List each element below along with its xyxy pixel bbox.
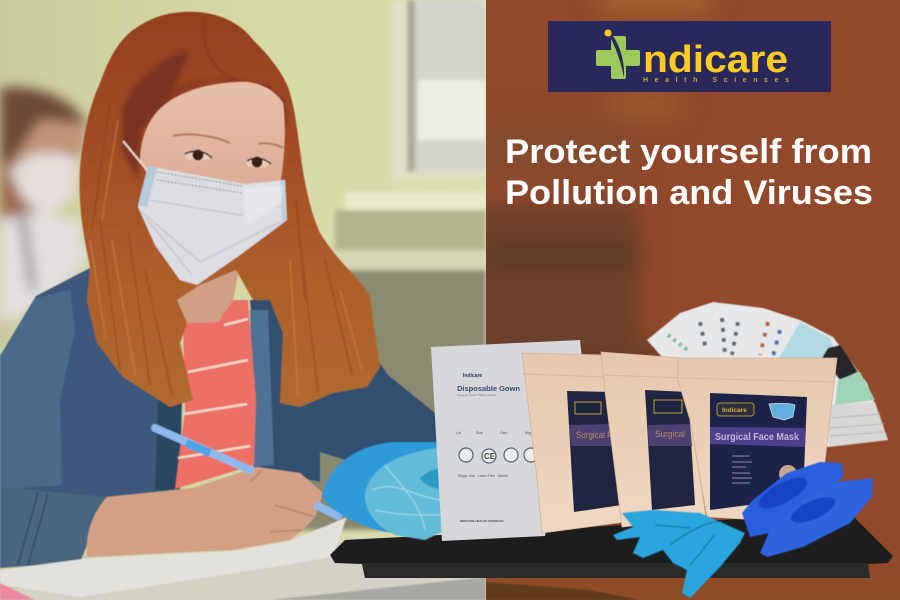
blue shoe covers bbox=[742, 462, 873, 557]
label panel bbox=[710, 393, 807, 510]
shadow under hair near ear bbox=[122, 50, 190, 180]
icon: green cross bbox=[596, 30, 640, 79]
disposable gown pack bbox=[431, 340, 582, 541]
blue mask bbox=[778, 322, 838, 360]
indicare badge bbox=[717, 403, 754, 416]
hair strands bbox=[92, 100, 352, 395]
hair caps bbox=[322, 442, 446, 540]
product tray bbox=[330, 513, 893, 578]
pink folder corner bbox=[0, 583, 35, 600]
logo on gown pack: Indicare bbox=[463, 373, 482, 379]
hair bbox=[79, 12, 380, 407]
face bbox=[140, 82, 285, 200]
label bbox=[645, 390, 695, 510]
disposable gown pack: Gsm bbox=[500, 431, 507, 435]
disposable gown pack: Single Use · Latex Free · Sterile bbox=[458, 474, 508, 478]
disposable gown pack: INDICARE HEALTH SCIENCES bbox=[460, 519, 503, 523]
title bbox=[505, 133, 873, 212]
window sill and cabinet bbox=[300, 192, 486, 530]
title: Protect yourself from bbox=[505, 133, 872, 171]
kraft pouch middle bbox=[601, 352, 706, 527]
background student bbox=[0, 87, 88, 330]
white masks bbox=[828, 402, 888, 447]
neck bbox=[170, 265, 240, 323]
certification marks bbox=[459, 448, 538, 463]
small product list bbox=[732, 456, 752, 483]
kraft pouch front: Surgical Face Mask: Surgical Face Mask bbox=[715, 431, 799, 443]
indicare badge: Indicare bbox=[722, 407, 747, 414]
writing arm bbox=[87, 467, 323, 557]
blue gloves bbox=[613, 510, 745, 598]
finger lines bbox=[250, 470, 315, 532]
eyes bbox=[185, 150, 271, 168]
disposable gown pack: Surgeon Gown Patient Gown bbox=[457, 393, 496, 397]
label bbox=[567, 391, 622, 512]
logo: Indicare Health Sciences: ndicare bbox=[643, 39, 788, 81]
kraft pouch front: Surgical Face Mask bbox=[678, 358, 837, 520]
icon: mask on label bbox=[769, 403, 795, 420]
panel: classroom photo background bbox=[0, 0, 486, 600]
disposable gown pack: Lot bbox=[456, 431, 461, 435]
pen grip bbox=[186, 443, 210, 453]
denim jacket bbox=[0, 268, 440, 568]
black mask bbox=[822, 345, 858, 380]
disposable gown pack: CE bbox=[484, 452, 496, 461]
disposable gown pack: Mfg bbox=[525, 431, 531, 435]
kraft pouch left bbox=[522, 353, 625, 533]
notebook bbox=[0, 517, 347, 597]
logo: Indicare Health Sciences bbox=[548, 21, 831, 92]
panel: brown overlay background bbox=[486, 0, 714, 600]
surgical face mask bbox=[138, 166, 287, 285]
green mask bbox=[835, 372, 875, 405]
pen bbox=[155, 428, 338, 516]
window bbox=[392, 0, 486, 178]
title: Pollution and Viruses bbox=[505, 174, 873, 212]
panel: pack of patterned masks bbox=[647, 302, 888, 447]
ear loop bbox=[123, 141, 147, 170]
table bbox=[0, 538, 486, 600]
printed mask patterns bbox=[668, 318, 780, 360]
disposable gown pack: Disposable Gown bbox=[457, 384, 520, 393]
disposable gown pack: Size bbox=[476, 431, 483, 435]
logo: Indicare Health Sciences: Health Sciences bbox=[643, 77, 789, 84]
coral striped shirt bbox=[175, 300, 256, 489]
girl with surgical mask bbox=[0, 12, 440, 600]
kraft pouch middle: Surgical bbox=[655, 429, 685, 439]
blurred room tones bbox=[466, 0, 710, 535]
icon: QR sticker bbox=[779, 465, 797, 483]
kraft pouch left: Surgical F bbox=[576, 430, 612, 440]
eyebrows bbox=[173, 134, 283, 148]
